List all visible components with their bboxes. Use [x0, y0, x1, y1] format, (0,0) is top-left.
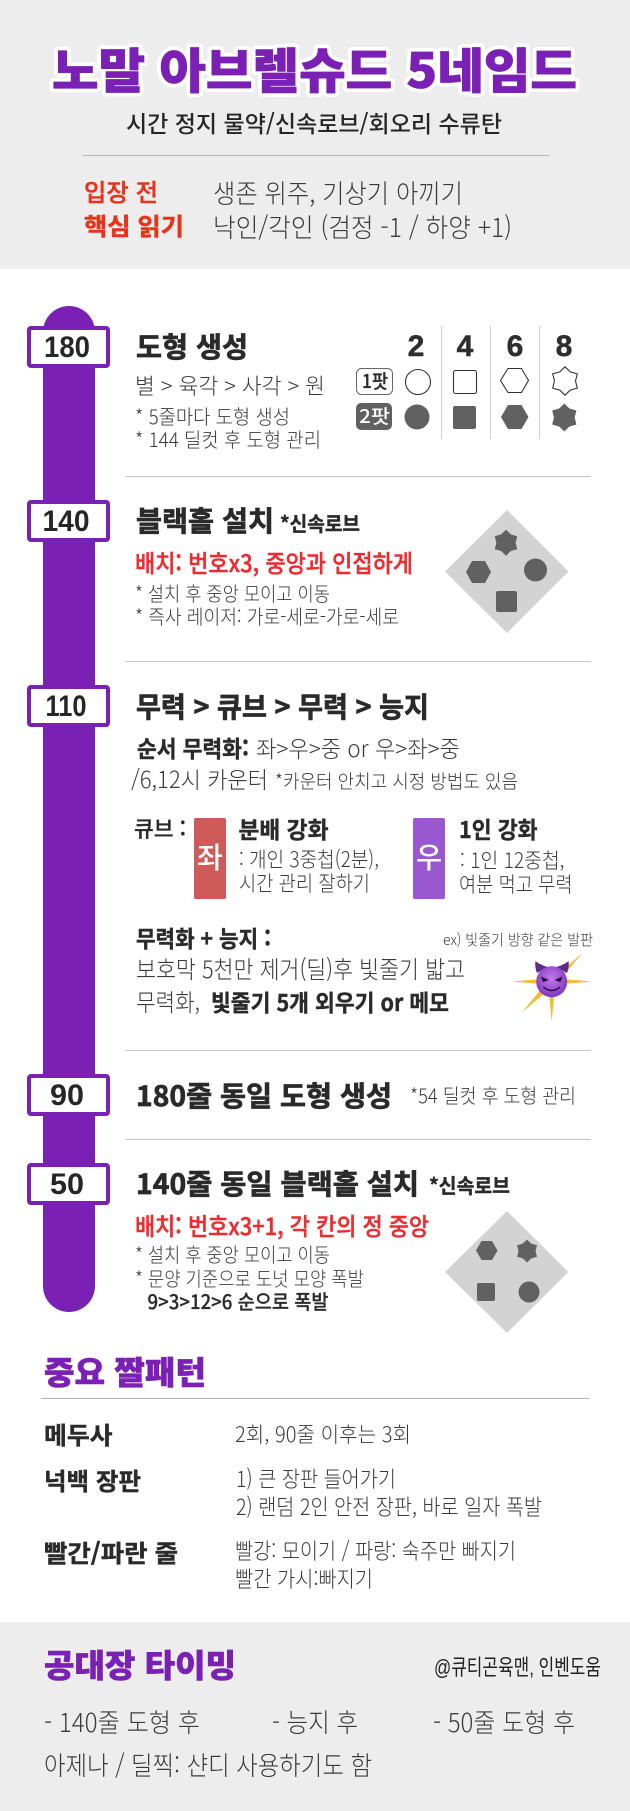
diagram: placement diamond: [445, 510, 568, 633]
column numbers: 4: [457, 330, 474, 363]
placement callout: 배치: 번호x3+1, 각 칸의 정 중앙: [135, 1207, 429, 1242]
diagram: placement diamond: [445, 1211, 568, 1333]
badge: 140: 140: [42, 505, 90, 538]
note: counter: *카운터 안치고 시정 방법도 있음: [275, 767, 518, 794]
heading: 공대장 타이밍: [44, 1641, 236, 1687]
column numbers: 2: [408, 330, 424, 363]
panel: phase 110: [131, 686, 593, 1022]
note: *54 딜컷 후 도형 관리: [410, 1080, 576, 1109]
panel: phase 140: [135, 500, 568, 633]
subtitle: 시간 정지 물약/신속로브/회오리 수류탄: [126, 105, 502, 139]
note: 아제나 / 딜찍: 샨디 사용하기도 함: [44, 1746, 372, 1783]
cube left text: : 개인 3중첩(2분),: [239, 844, 379, 874]
row text: lines 1: 빨강: 모이기 / 파랑: 숙주만 빠지기: [235, 1534, 516, 1566]
tag: *신속로브: [280, 508, 360, 537]
text: key reading: 낙인/각인 (검정 -1 / 하양 +1): [213, 208, 512, 245]
pill: party 2: 2팟: [359, 402, 390, 429]
cube right heading: 1인 강화: [459, 811, 538, 845]
panel: leader timing: [0, 1622, 630, 1811]
title: 노말 아브렐슈드 5네임드: [52, 32, 577, 102]
heading: 도형 생성: [136, 326, 248, 366]
label: key reading: 핵심 읽기: [84, 207, 184, 242]
note: * 설치 후 중앙 모이고 이동: [135, 1239, 330, 1268]
text: before entering: 생존 위주, 기상기 아끼기: [213, 174, 463, 211]
label: cube: 큐브 :: [134, 812, 186, 844]
panel: phase 180: [135, 326, 577, 453]
badge: 140: [29, 502, 108, 540]
heading: 무력 > 큐브 > 무력 > 능지: [136, 686, 429, 726]
timeline bar: [43, 306, 95, 1312]
timing 3: - 50줄 도형 후: [433, 1703, 575, 1740]
panel: phase 90: [136, 1075, 576, 1115]
subheading: neutralize + wit: 무력화 + 능지 :: [136, 920, 271, 954]
row text: lines 2: 빨간 가시:빠지기: [235, 1562, 373, 1594]
text: neutralize order label: 순서 무력화:: [137, 730, 249, 764]
row label: medusa: 메두사: [44, 1416, 112, 1451]
timing 2: - 능지 후: [272, 1703, 358, 1740]
panel: key short patterns: [41, 1348, 590, 1594]
panel: header: [0, 0, 630, 269]
cube left heading: 분배 강화: [238, 811, 328, 845]
title: 노말 아브렐슈드 5네임드: [52, 32, 577, 102]
row label: red and blue lines: 빨간/파란 줄: [44, 1534, 178, 1569]
badge: 110: 110: [46, 690, 86, 723]
column numbers: [408, 330, 572, 363]
cube: left: [194, 818, 226, 899]
text: memorize: 빛줄기 5개 외우기 or 메모: [211, 984, 449, 1018]
column numbers: 6: [507, 330, 523, 363]
badge: 110: [29, 687, 108, 725]
row label: knockback: 넉백 장판: [44, 1462, 141, 1497]
cube left text: 시간 관리 잘하기: [239, 868, 370, 898]
outline shapes: [406, 367, 577, 395]
text: neutralize order: 좌>우>중 or 우>좌>중: [256, 730, 460, 764]
badge: 50: 50: [50, 1168, 84, 1201]
cube right text: : 1인 12중첩,: [460, 845, 564, 875]
heading: 140줄 동일 블랙홀 설치: [136, 1163, 419, 1203]
note: * 144 딜컷 후 도형 관리: [135, 424, 321, 453]
cube: right: [413, 818, 445, 899]
badge: 90: [29, 1076, 108, 1114]
note: * 설치 후 중앙 모이고 이동: [135, 578, 330, 607]
badge: 90: 90: [50, 1079, 84, 1112]
badge: 50: [29, 1165, 108, 1203]
note: * 5줄마다 도형 생성: [135, 401, 290, 430]
heading: 중요 짤패턴: [44, 1348, 206, 1394]
text: neutralize: 무력화,: [136, 983, 200, 1018]
cube right text: 여분 먹고 무력: [459, 869, 572, 899]
note: explosion order: 9>3>12>6 순으로 폭발: [148, 1286, 328, 1315]
text: order: 별 > 육각 > 사각 > 원: [135, 369, 325, 401]
note: * 문양 기준으로 도넛 모양 폭발: [135, 1263, 364, 1292]
text: shield: 보호막 5천만 제거(딜)후 빛줄기 밟고: [136, 950, 465, 985]
filled shapes: [404, 404, 576, 432]
note: example: ex) 빛줄기 방향 같은 발판: [443, 929, 593, 950]
tag: *신속로브: [429, 1170, 510, 1199]
placement callout: 배치: 번호x3, 중앙과 인접하게: [135, 544, 413, 579]
cube: left: 좌: [197, 835, 223, 877]
row text: medusa: 2회, 90줄 이후는 3회: [235, 1419, 411, 1449]
column numbers: 8: [556, 330, 572, 363]
label: before entering: 입장 전: [84, 173, 158, 208]
row text: knockback 1: 1) 큰 장판 들어가기: [236, 1462, 396, 1494]
shape table: [356, 326, 577, 439]
heading: 180줄 동일 도형 생성: [136, 1075, 392, 1115]
icon: devil with rays: [512, 953, 593, 1022]
pill: party 1: 1팟: [362, 367, 388, 394]
row text: knockback 2: 2) 랜덤 2인 안전 장판, 바로 일자 폭발: [236, 1490, 542, 1522]
cube: right: 우: [416, 835, 442, 877]
timing 1: - 140줄 도형 후: [44, 1703, 200, 1740]
text: counter: /6,12시 카운터: [131, 761, 268, 795]
badge: 180: 180: [44, 331, 90, 364]
panel: phase 50: [135, 1163, 568, 1333]
badge: 180: [29, 328, 108, 366]
heading: 블랙홀 설치: [136, 500, 274, 540]
note: * 즉사 레이저: 가로-세로-가로-세로: [135, 601, 399, 630]
